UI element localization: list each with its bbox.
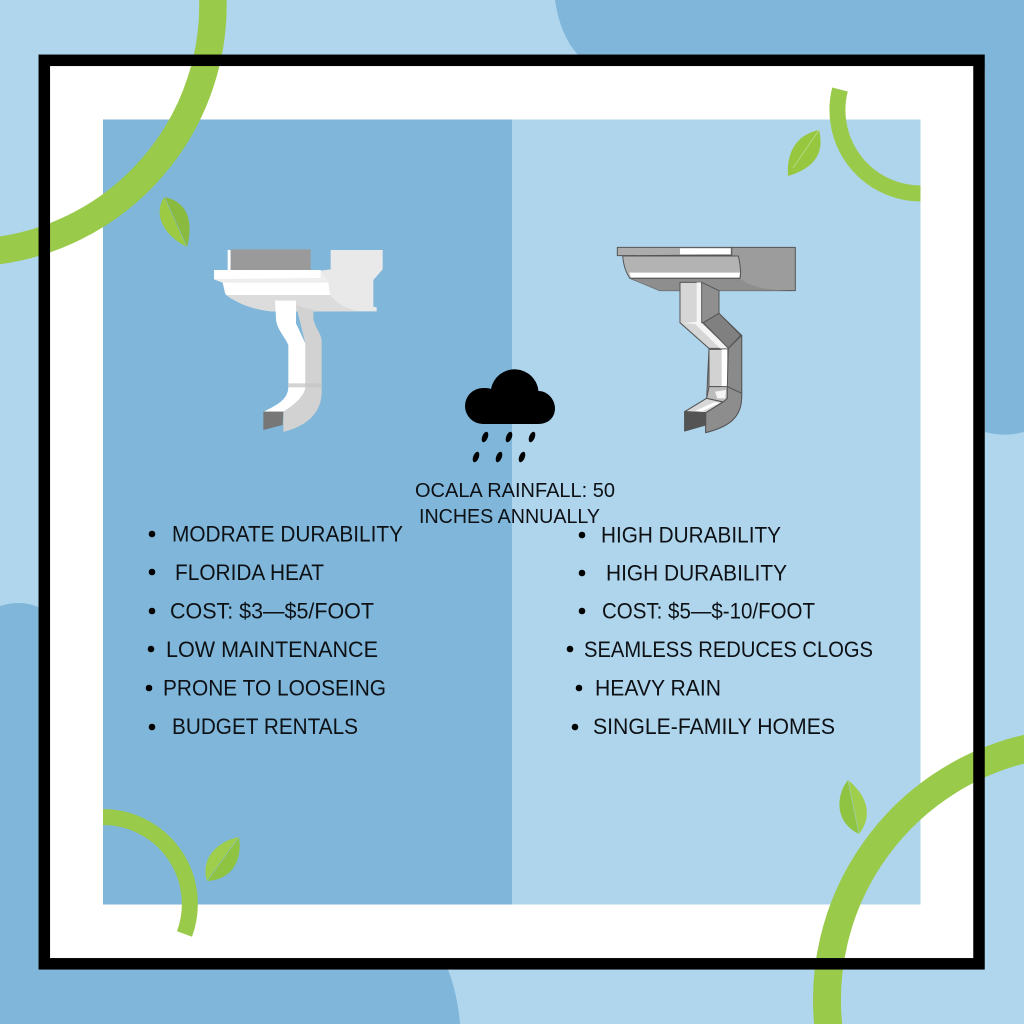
right bullet list xyxy=(567,522,873,739)
green arc: top right small xyxy=(837,90,920,194)
right bullet list: COST: $5—$-10/FOOT xyxy=(602,598,815,624)
green arc: bottom right xyxy=(827,747,1024,1024)
left bullet list: MODRATE DURABILITY xyxy=(172,522,403,546)
rainfall caption: INCHES ANNUALLY xyxy=(419,506,600,528)
icon: gray aluminum gutter xyxy=(617,247,795,433)
right bullet list: SINGLE-FAMILY HOMES xyxy=(593,714,835,739)
left bullet list xyxy=(146,522,403,739)
background blob: top right xyxy=(555,0,1024,435)
icon: rain cloud xyxy=(465,369,555,463)
right bullet list: SEAMLESS REDUCES CLOGS xyxy=(584,637,873,662)
left bullet list: PRONE TO LOOSEING xyxy=(163,676,386,700)
leaf: bottom left xyxy=(205,837,240,881)
left bullet list: COST: $3—$5/FOOT xyxy=(170,598,374,624)
left bullet list: LOW MAINTENANCE xyxy=(166,637,378,662)
icon: white vinyl gutter xyxy=(214,249,383,432)
leaf: top right xyxy=(788,130,821,176)
green arc: bottom left small xyxy=(103,817,190,934)
panel: aluminum gutters background xyxy=(512,120,920,904)
green arc: top left xyxy=(0,0,213,252)
left bullet list: FLORIDA HEAT xyxy=(175,560,324,585)
rainfall caption: OCALA RAINFALL: 50 xyxy=(415,480,615,502)
leaf: top left xyxy=(160,197,190,247)
rainfall caption xyxy=(415,480,615,528)
background blob: bottom left xyxy=(0,603,460,1024)
left bullet list: BUDGET RENTALS xyxy=(172,714,358,739)
right bullet list: HEAVY RAIN xyxy=(595,676,721,700)
panel: vinyl gutters background xyxy=(103,120,512,904)
right bullet list: HIGH DURABILITY xyxy=(606,560,787,586)
right bullet list: HIGH DURABILITY xyxy=(601,522,781,548)
leaf: bottom right xyxy=(839,780,867,834)
